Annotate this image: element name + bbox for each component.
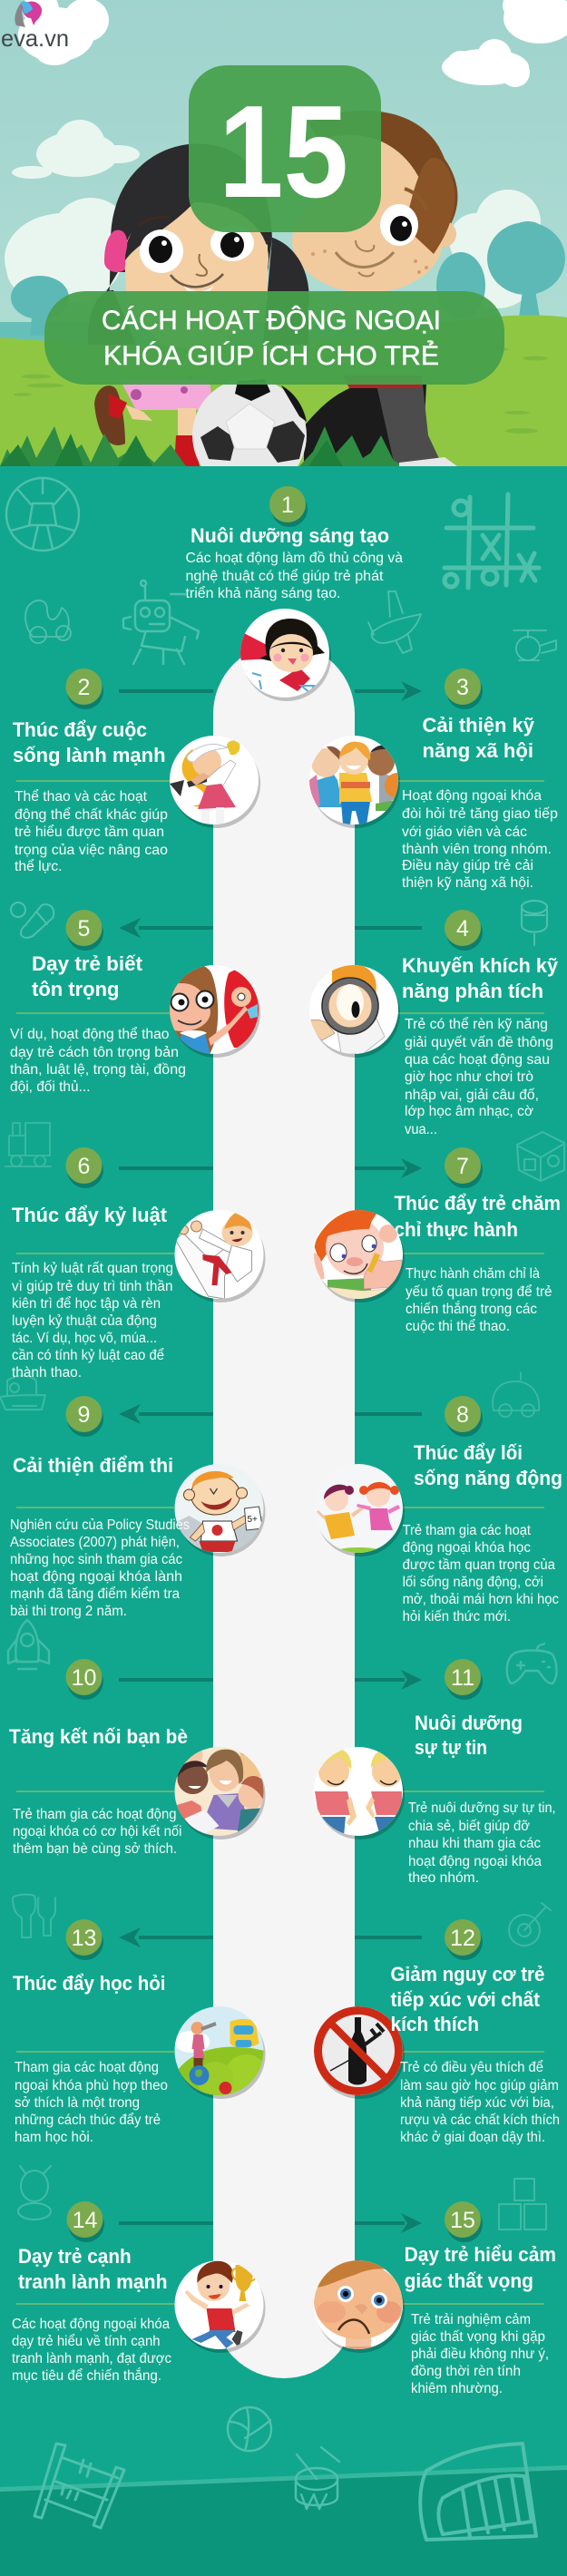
badge 9: 9 (78, 1402, 90, 1428)
photo: child exploring (174, 2006, 269, 2099)
title banner (44, 291, 504, 385)
heading: sự tự tin (415, 1736, 487, 1759)
body text: chia sẻ, biết giúp đỡ (408, 1819, 530, 1834)
doodle: alphabet blocks (499, 2179, 546, 2230)
arrow row 6-7 (119, 1158, 422, 1178)
body text: Thể thao và các hoạt (15, 789, 148, 805)
doodle: toy creature (18, 2166, 51, 2220)
badge 6 (65, 1147, 103, 1188)
heading: tôn trọng (32, 978, 120, 1000)
logo (2, 2, 67, 47)
photo: sad boy (314, 2259, 405, 2353)
background trees and hills (0, 221, 565, 341)
white center column (213, 643, 355, 2378)
divider (16, 2051, 174, 2053)
photo: three friends (309, 736, 410, 828)
body text: mạnh đã tăng điểm kiểm tra (10, 1586, 180, 1602)
body text (185, 551, 403, 601)
grass field (0, 316, 567, 466)
section 5: respect (10, 910, 422, 1095)
doodle: boat (0, 1376, 45, 1410)
section 14: competition (12, 2201, 422, 2384)
heading (414, 1441, 562, 1489)
badge 10: 10 (72, 1665, 96, 1691)
photo: girl and mirror (170, 963, 261, 1058)
badge 15: 15 (450, 2208, 475, 2233)
body text: hoạt động ngoại khóa (408, 1854, 542, 1869)
body text: dạy trẻ cách tôn trọng bản (10, 1045, 179, 1060)
doodle: elephant car (493, 1372, 539, 1417)
section 2: healthy life (13, 668, 422, 874)
body text: tranh lành mạnh, đạt được (12, 2351, 171, 2366)
heading: Thúc đẩy cuộc (13, 718, 147, 741)
body text: ngoại khóa phù hợp theo (15, 2078, 168, 2093)
badge 5 (65, 910, 103, 951)
body text: đồng thời rèn tính (411, 2364, 521, 2379)
heading (402, 954, 559, 1002)
body text (406, 1266, 552, 1334)
body text: mở, thoải mái hơn khi học (403, 1592, 559, 1607)
body text: sở thích là một trong (15, 2095, 140, 2111)
section 15: disappointment (314, 2201, 556, 2396)
body text: ham học hỏi. (15, 2130, 93, 2145)
doodle: drum (522, 901, 547, 945)
doodle: dice (517, 1132, 564, 1181)
photo: boy with magnifier (309, 964, 400, 1058)
heading (390, 1963, 544, 2035)
doodle: train (5, 1123, 51, 1166)
body text: đòi hỏi trẻ tăng giao tiếp (402, 806, 558, 822)
body text: rượu và các chất kích thích (400, 2113, 560, 2128)
illustration: foreground grass (0, 426, 404, 466)
heading (32, 952, 143, 1000)
photo: boy with trophy (174, 2260, 265, 2353)
body text: dạy trẻ hiểu về tính cạnh (12, 2334, 161, 2349)
body text: lớp học âm nhạc, cờ (405, 1104, 533, 1119)
body text: bài thi trong 2 năm. (10, 1604, 127, 1619)
photo: two jumping kids (314, 1464, 405, 1560)
photo: prohibition sign (314, 2006, 405, 2099)
body text: cần có tính kỷ luật cao để (12, 1348, 164, 1363)
body text: giác thất vọng khi gặp (411, 2329, 545, 2345)
body text: Trẻ nuôi dưỡng sự tự tin, (408, 1800, 556, 1816)
heading: Nuôi dưỡng sáng tạo (191, 524, 389, 547)
badge 8: 8 (456, 1402, 469, 1428)
arrow row 13-12 (119, 1927, 422, 1947)
section 4: analytical skills (309, 910, 559, 1137)
body text (15, 2060, 168, 2145)
body text: khiêm nhường. (411, 2381, 503, 2396)
badge 3: 3 (456, 675, 469, 700)
hero panel (0, 0, 567, 508)
bottom darker band (0, 2465, 567, 2576)
body text: Thực hành chăm chỉ là (406, 1266, 540, 1282)
heading (423, 714, 535, 762)
illustration: soccer ball (192, 378, 307, 466)
badge 14: 14 (73, 2208, 97, 2233)
body text: Trẻ tham gia các hoạt động (13, 1807, 176, 1822)
title banner: CÁCH HOẠT ĐỘNG NGOẠI (102, 305, 441, 336)
heading: Khuyến khích kỹ (402, 954, 559, 977)
body text: động ngoại khóa học (403, 1540, 531, 1556)
divider (397, 2051, 544, 2053)
body text: khả năng tiếp xúc với bia, (400, 2095, 554, 2111)
body text: Tính kỷ luật rất quan trọng (12, 1261, 173, 1276)
body text (10, 1517, 190, 1619)
body text (10, 1027, 186, 1095)
body text: đội, đối thủ... (10, 1079, 91, 1095)
clouds (5, 0, 567, 308)
body text: Tham gia các hoạt động (15, 2060, 159, 2075)
divider (16, 1791, 174, 1792)
doodle: drum with sticks (296, 2447, 339, 2509)
body text: trọng của việc nâng cao (15, 843, 168, 858)
badge 7 (445, 1147, 483, 1188)
divider (397, 1012, 544, 1014)
doodle: fork and spoon (13, 1895, 55, 1937)
heading: Nuôi dưỡng (415, 1712, 523, 1734)
body text: tác. Ví dụ, học võ, múa... (12, 1331, 157, 1346)
body text: hỏi kiến thức mới. (403, 1609, 511, 1625)
divider (16, 780, 170, 782)
body text (12, 2317, 171, 2384)
heading (18, 2245, 167, 2293)
heading: sống năng động (414, 1467, 562, 1489)
badge 7: 7 (456, 1154, 469, 1179)
body text: cuộc thi thể thao. (406, 1319, 510, 1334)
body text: Điều này giúp trẻ cải (402, 858, 533, 873)
section 11: confidence (314, 1659, 556, 1886)
badge 2 (65, 668, 103, 709)
illustration: boy legs (304, 376, 439, 463)
heading: giác thất vọng (405, 2269, 533, 2292)
doodle: guitar (509, 1903, 551, 1946)
body text: thêm bạn bè cùng sở thích. (13, 1841, 177, 1857)
doodle: piano (420, 2444, 536, 2540)
body text (405, 1017, 553, 1137)
body text: kiên trì để học tập và rèn (12, 1296, 161, 1312)
heading: Cải thiện kỹ (423, 714, 535, 737)
body text (411, 2312, 549, 2396)
section 12: reduce risk (314, 1919, 560, 2145)
divider (397, 780, 544, 782)
doodle: robot (123, 581, 199, 664)
heading: Thúc đẩy học hỏi (13, 1972, 165, 1995)
doodle: tool (11, 903, 54, 938)
doodle: game controller (507, 1644, 557, 1683)
body text: thành thao. (12, 1365, 82, 1381)
badge 12 (445, 1919, 483, 1960)
doodle: soccer ball (6, 478, 79, 551)
body text: được tầm quan trọng của (403, 1557, 555, 1573)
heading (415, 1712, 523, 1759)
body text: Trẻ có điều yêu thích để (400, 2060, 543, 2075)
heading: Dạy trẻ hiểu cảm (405, 2243, 556, 2266)
background doodle icons (0, 478, 564, 2540)
body text: qua các hoạt động sau (405, 1052, 550, 1068)
section 3: social skills (309, 668, 558, 891)
doodle: basketball (228, 2407, 271, 2451)
section 8: active lifestyle (314, 1396, 562, 1625)
body text: vì giúp trẻ duy trì tinh thần (12, 1279, 172, 1294)
body text (402, 788, 558, 891)
body text (15, 789, 168, 874)
section 6: discipline (12, 1147, 422, 1381)
doodle: airplane (368, 591, 421, 653)
doodle: abacus (34, 2444, 124, 2528)
badge 9 (65, 1396, 103, 1437)
body text: thể lực. (15, 859, 62, 874)
arrow row 2-3 (119, 681, 422, 701)
badge 12: 12 (450, 1926, 475, 1951)
body text: vua... (405, 1122, 437, 1137)
badge 13: 13 (72, 1926, 96, 1951)
body text: nhau khi tham gia các (408, 1836, 541, 1851)
arrow row 5-4 (119, 918, 422, 938)
body text: lối sống năng động, cởi (403, 1575, 543, 1590)
body text: Các hoạt động làm đồ thủ công và (185, 551, 403, 566)
badge 10 (65, 1659, 103, 1700)
body text: Hoạt động ngoại khóa (402, 788, 542, 804)
photo: boy studying (314, 1209, 405, 1303)
body text: làm sau giờ học giúp giảm (400, 2078, 559, 2093)
divider (397, 1253, 544, 1254)
body text: nghệ thuật có thể giúp trẻ phát (185, 569, 384, 584)
heading: năng xã hội (423, 739, 533, 762)
body text: theo nhóm. (408, 1870, 479, 1886)
section 10: friends (9, 1659, 422, 1857)
body text: trẻ hiểu được tầm quan (15, 825, 164, 840)
heading: Thúc đẩy kỷ luật (12, 1204, 168, 1226)
doodle: tic tac toe (445, 494, 539, 600)
heading: Cải thiện điểm thi (13, 1454, 173, 1477)
divider (397, 1507, 544, 1508)
arrow row 9-8 (119, 1404, 422, 1424)
body text: giờ học như chơi trò (405, 1069, 533, 1085)
number badge 15 (189, 65, 381, 232)
body text: động thể chất khác giúp (15, 807, 168, 823)
photo: girl drawing (240, 609, 331, 701)
heading: tranh lành mạnh (18, 2270, 167, 2293)
badge 11: 11 (451, 1665, 474, 1691)
body text: ngoại khóa có cơ hội kết nối (13, 1824, 181, 1839)
badge 4: 4 (456, 916, 469, 942)
heading (394, 1192, 561, 1241)
photo: teacher and children (174, 1744, 265, 1839)
body text: yếu tố quan trọng để trẻ (406, 1284, 552, 1300)
photo: twin boys (314, 1747, 405, 1839)
body text: triển khả năng sáng tạo. (185, 586, 341, 601)
heading: sống lành mạnh (13, 744, 165, 766)
body text: Ví dụ, hoạt động thể thao (10, 1027, 169, 1042)
heading: chỉ thực hành (394, 1218, 518, 1241)
section 1: creativity (185, 486, 403, 701)
illustration: boy (292, 111, 457, 293)
body text: phải điều không như ý, (411, 2347, 549, 2362)
heading: năng phân tích (402, 980, 543, 1002)
heading: Giảm nguy cơ trẻ (390, 1963, 544, 1986)
body text (400, 2060, 560, 2145)
badge 3 (445, 668, 483, 709)
body text: thiện kỹ năng xã hội. (402, 875, 533, 891)
body text: thành viên trong nhóm. (402, 842, 552, 857)
body text: mục tiêu để chiến thắng. (12, 2368, 161, 2384)
doodle: toy duck (25, 600, 71, 643)
section 7: practice (314, 1147, 561, 1334)
badge 8 (445, 1396, 483, 1437)
arrow row 10-11 (119, 1670, 422, 1690)
body text: hoạt động ngoại khóa lành (10, 1569, 182, 1585)
section 9: test scores (10, 1396, 422, 1619)
divider (397, 2303, 544, 2305)
heading (13, 718, 165, 766)
heading: Tăng kết nối bạn bè (9, 1725, 188, 1748)
divider (397, 1791, 544, 1792)
logo: eva.vn (1, 24, 69, 52)
badge 15 (445, 2201, 483, 2242)
heading: Thúc đẩy lối (414, 1441, 523, 1464)
doodle: rocket (8, 1620, 49, 1669)
arrow row 14-15 (119, 2213, 422, 2233)
divider (16, 1012, 170, 1014)
body text: Trẻ có thể rèn kỹ năng (405, 1017, 548, 1032)
heading: tiếp xúc với chất (390, 1988, 541, 2011)
heading: Dạy trẻ biết (32, 952, 143, 975)
photo: boy with test paper: 5+ (247, 1515, 258, 1525)
body text: Associates (2007) phát hiện, (10, 1535, 180, 1550)
body text: khác ở giai đoạn dậy thì. (400, 2130, 545, 2145)
heading: Thúc đẩy trẻ chăm (394, 1192, 561, 1215)
badge 13 (65, 1919, 103, 1960)
badge 2: 2 (78, 675, 90, 700)
illustration: girl (88, 143, 309, 466)
heading (405, 2243, 556, 2292)
body text (13, 1807, 181, 1857)
badge 4 (445, 910, 483, 951)
badge 11 (445, 1659, 483, 1700)
body text (12, 1261, 173, 1381)
divider (16, 2303, 174, 2305)
badge 1: 1 (281, 493, 294, 518)
body text: Các hoạt động ngoại khóa (12, 2317, 170, 2332)
badge 14 (67, 2201, 104, 2242)
body text: những cách thúc đẩy trẻ (15, 2113, 161, 2128)
body text: Nghiên cứu của Policy Studies (10, 1517, 190, 1533)
badge 6: 6 (78, 1154, 90, 1179)
body text: Trẻ tham gia các hoạt (403, 1523, 532, 1538)
body text (408, 1800, 556, 1886)
badge 1 (269, 486, 308, 527)
section 13: learning (13, 1919, 422, 2145)
body text: thân, luật lệ, trọng tài, đồng (10, 1062, 186, 1078)
doodle: helicopter (513, 630, 556, 660)
heading: kích thích (390, 2013, 479, 2035)
divider (16, 1507, 174, 1508)
title banner: KHÓA GIÚP ÍCH CHO TRẺ (103, 340, 439, 371)
divider (16, 1253, 174, 1254)
photo: tennis girl (170, 736, 260, 828)
heading: Dạy trẻ cạnh (18, 2245, 132, 2268)
body text: luyện kỷ thuật của động (12, 1313, 157, 1329)
body text: giải quyết vấn đề thông (405, 1035, 553, 1050)
body text: nhập vai, giải câu đố, (405, 1088, 539, 1103)
badge 5: 5 (78, 916, 90, 942)
number badge 15: 15 (219, 78, 348, 225)
body text: Trẻ trải nghiệm cảm (411, 2312, 531, 2327)
photo: boy with test paper (174, 1464, 265, 1556)
body text: với giáo viên và các (402, 825, 527, 840)
body text: chiến thắng trong các (406, 1302, 537, 1317)
photo: karate boy (174, 1210, 265, 1303)
body text (403, 1523, 559, 1625)
body text: những học sinh tham gia các (10, 1552, 182, 1567)
